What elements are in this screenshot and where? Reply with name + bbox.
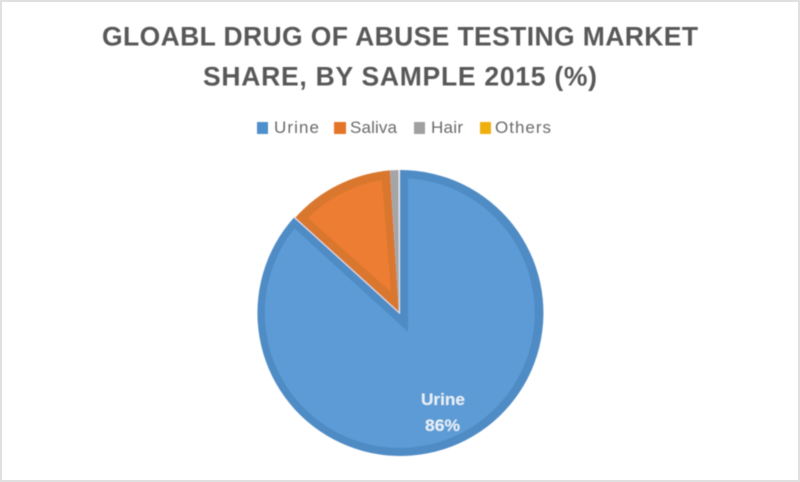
slice: Saliva — [295, 170, 399, 313]
data label: Urine 86% — [421, 390, 465, 435]
title: SHARE, BY SAMPLE 2015 (%) — [203, 62, 597, 92]
legend item: Hair: Hair — [431, 118, 463, 137]
slice: Urine 86% — [257, 170, 543, 456]
data label: Urine 86%: Urine — [421, 390, 465, 409]
slice: Hair — [390, 170, 399, 313]
legend item: Urine: Urine — [274, 118, 319, 137]
title — [102, 22, 698, 92]
pie chart — [257, 170, 543, 456]
legend — [257, 118, 551, 137]
data label: Urine 86%: 86% — [425, 416, 460, 435]
legend item: Saliva: Saliva — [350, 118, 398, 137]
legend item: Others: Others — [495, 118, 551, 137]
legend item: Hair — [414, 118, 463, 137]
title: GLOABL DRUG OF ABUSE TESTING MARKET — [102, 22, 698, 52]
